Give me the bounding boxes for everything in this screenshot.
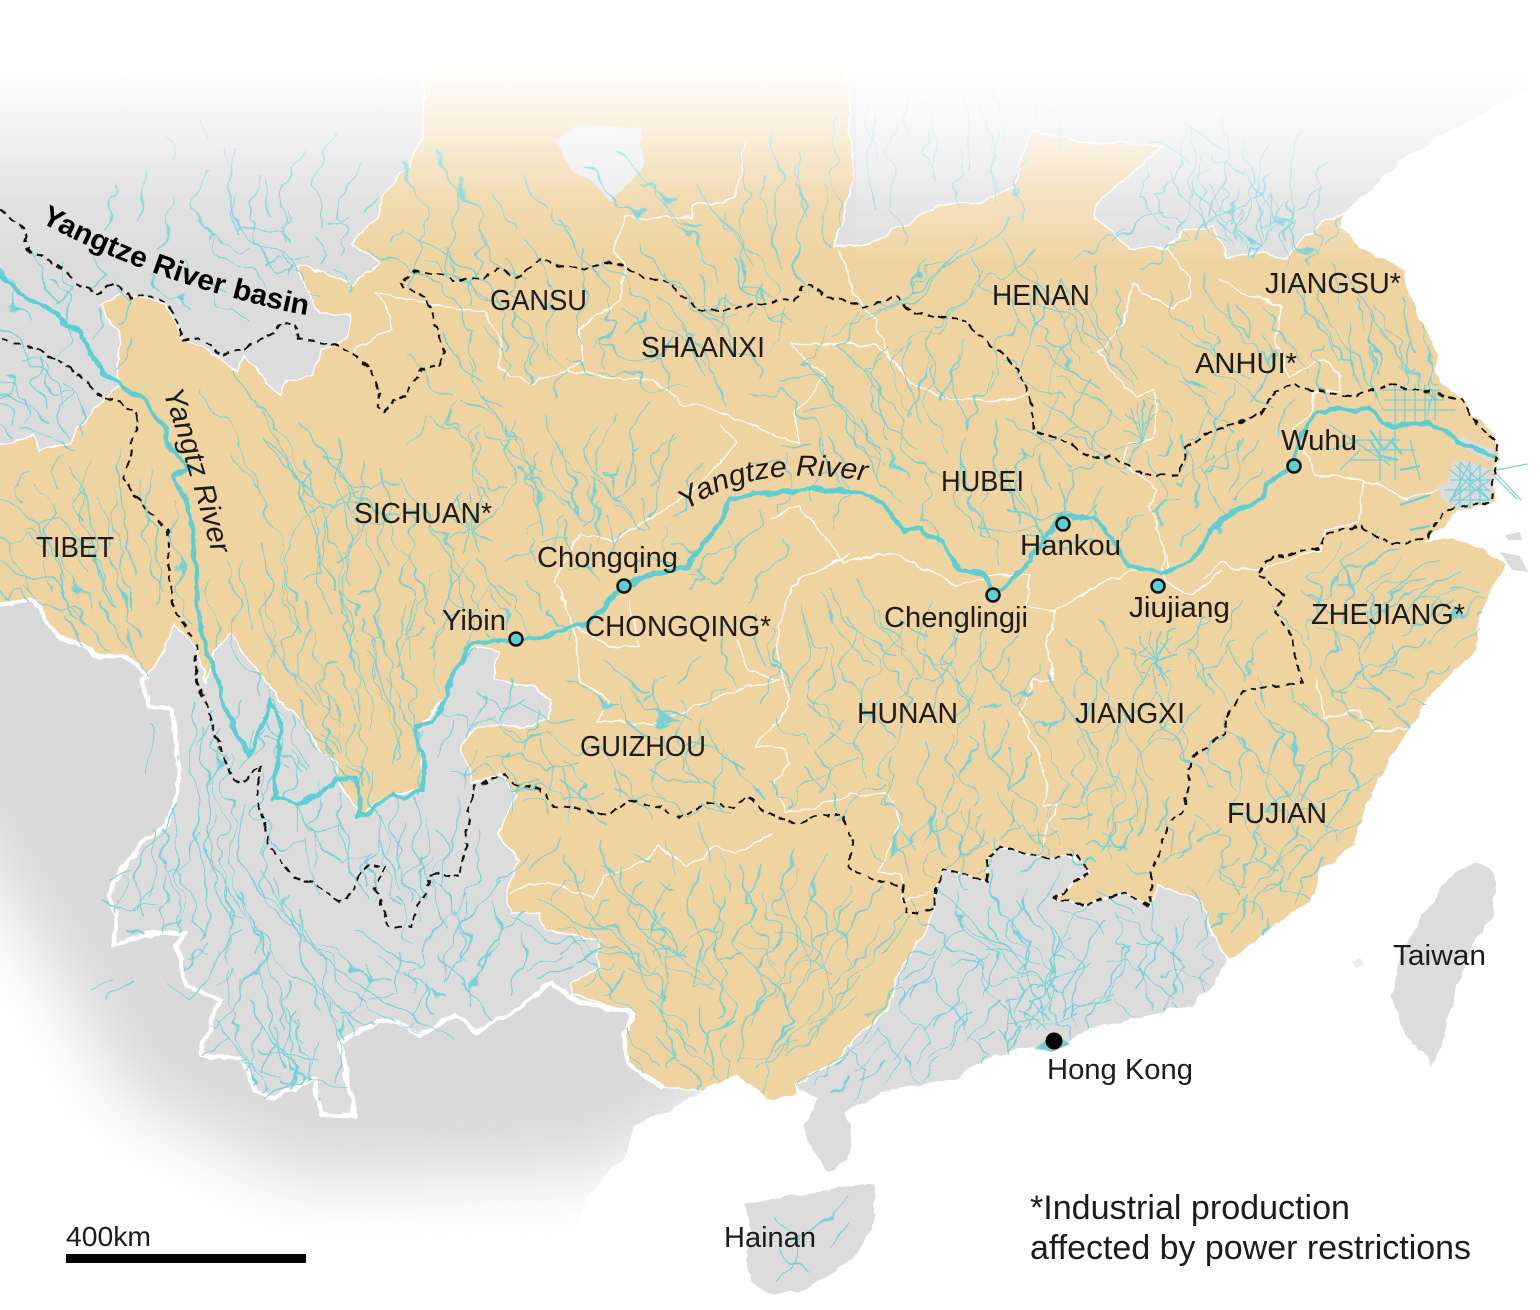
land: solid grey inside the southwestern border [0, 250, 640, 1115]
city and island labels: Chenglingji [884, 602, 1028, 634]
Yangtze River basin dashed boundary [0, 210, 1497, 927]
Hong Kong marker [1046, 1032, 1062, 1050]
scale bar: 400km [66, 1221, 151, 1252]
province labels: ZHEJIANG* [1311, 599, 1465, 631]
footnote: *Industrial production [1030, 1189, 1350, 1227]
city and island labels: Yibin [442, 605, 506, 637]
rivers: extra density clipped to land [20, 106, 1485, 1102]
land: Guangdong and Guangxi grey area [770, 840, 1227, 1170]
land: Taiwan island [1391, 862, 1497, 1067]
province borders [356, 139, 1438, 901]
province labels: CHONGQING* [585, 611, 771, 643]
rivers: Yangtze delta grid [1330, 385, 1527, 507]
northern fade to white [0, 0, 1540, 265]
curved label guide paths [40, 222, 866, 554]
footnote [1030, 1189, 1471, 1267]
basin title along boundary: Yangtze River basin [47, 204, 308, 315]
city and island labels: Chongqing [537, 542, 678, 574]
city and island labels: Jiujiang [1129, 592, 1230, 624]
city and island labels: Wuhu [1281, 425, 1357, 457]
footnote: affected by power restrictions [1030, 1229, 1471, 1267]
rivers: second extra layer clipped to land [0, 93, 1446, 1103]
province labels: TIBET [36, 532, 114, 564]
province labels: SHAANXI [641, 332, 765, 364]
province labels: GANSU [490, 285, 587, 317]
province labels: SICHUAN* [354, 498, 492, 530]
small offshore islands [1020, 532, 1528, 1050]
Hong Kong water patch [1036, 1034, 1070, 1052]
thick white border around Yunnan and the southwest [0, 601, 663, 1115]
city and island labels [442, 425, 1486, 1254]
province labels: JIANGSU* [1265, 268, 1401, 300]
province labels [36, 268, 1465, 830]
province labels: HENAN [992, 280, 1090, 312]
land: northern grey area [0, 0, 1540, 600]
province labels: HUBEI [941, 466, 1024, 498]
city markers [510, 460, 1300, 646]
land: Hainan island [744, 1184, 876, 1294]
city and island labels: Hong Kong [1047, 1054, 1193, 1086]
wide delta channels [1370, 430, 1430, 530]
province labels: FUJIAN [1227, 798, 1327, 830]
pocket of grey land in the north of the basin [555, 125, 644, 202]
province labels: GUIZHOU [580, 731, 706, 763]
city and island labels: Hainan [724, 1222, 816, 1254]
extra fade over the eastern plain [856, 60, 1540, 270]
label: upper Yangtze river: Yangtz River [165, 388, 228, 552]
land: soft grey shading southwest [0, 480, 730, 1180]
basin provinces: orange area [0, 60, 1506, 1100]
rivers: dense fans near Chengdu, Anhui, Poyang [446, 400, 1177, 690]
rivers: Guangdong delta [980, 1000, 1050, 1054]
Yangtze main river [0, 265, 1497, 816]
scale bar [66, 1221, 306, 1263]
city and island labels: Taiwan [1393, 940, 1486, 972]
province labels: ANHUI* [1195, 348, 1297, 380]
label: Yangtze River: Yangtze River [677, 455, 870, 507]
Shanghai and Chongming grey patches [1437, 437, 1493, 510]
province labels: JIANGXI [1075, 698, 1185, 730]
city and island labels: Hankou [1020, 530, 1121, 562]
province labels: HUNAN [857, 698, 958, 730]
sea cut-out along south coast [540, 500, 1540, 1310]
